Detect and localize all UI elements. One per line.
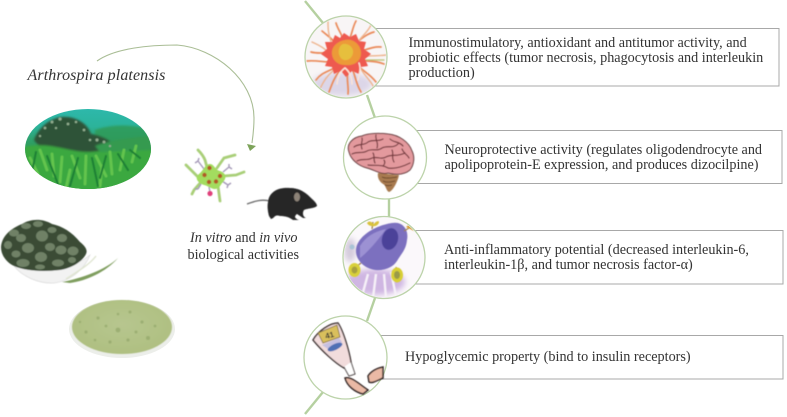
text: in vitro and in vivo caption: In vitro and in vivo: [189, 230, 297, 246]
panel: immunostimulatory text box: [370, 28, 779, 86]
panel: immunostimulatory text box: Immunostimulatory, antioxidant and antitumor activity, and: [408, 35, 747, 51]
arrow: curved arrow from species to activities: [97, 45, 256, 151]
icon: brain in circle: [344, 116, 426, 199]
icon: glucose meter in circle: 41: [324, 330, 336, 341]
icon: glucose meter in circle: [304, 316, 387, 399]
panel: immunostimulatory text box: probiotic effects (tumor necrosis, phagocytosis and interleukin: [408, 50, 763, 66]
image: spirulina powder: [69, 300, 175, 358]
connector line: vertical chain behind circles: [305, 1, 389, 414]
icon: black mouse: [247, 188, 317, 220]
title: species name: Arthrospira platensis: [26, 67, 165, 84]
panel: neuroprotective text box: Neuroprotective activity (regulates oligodendrocyte and: [444, 142, 762, 158]
panel: anti-inflammatory text box: interleukin-1β, and tumor necrosis factor-α): [444, 257, 693, 273]
icon: green cell: [186, 150, 244, 201]
panel: neuroprotective text box: apolipoprotein-E expression, and produces dizocilpine): [444, 157, 759, 173]
panel: neuroprotective text box: [410, 130, 782, 184]
panel: immunostimulatory text box: production): [408, 65, 475, 81]
icon: immune cell in circle: [305, 16, 387, 98]
icon: purple inflammatory cell in circle: [343, 216, 425, 298]
panel: hypoglycemic text box: Hypoglycemic property (bind to insulin receptors): [405, 349, 691, 365]
text: biological activities caption: biological activities: [188, 247, 299, 263]
panel: hypoglycemic text box: [370, 336, 783, 379]
panel: anti-inflammatory text box: Anti-inflammatory potential (decreased interleukin-6,: [444, 242, 749, 258]
image: bowl of spirulina tablets: [1, 220, 118, 283]
panel: anti-inflammatory text box: [410, 230, 783, 284]
image: algae underwater ellipse: [25, 109, 155, 195]
